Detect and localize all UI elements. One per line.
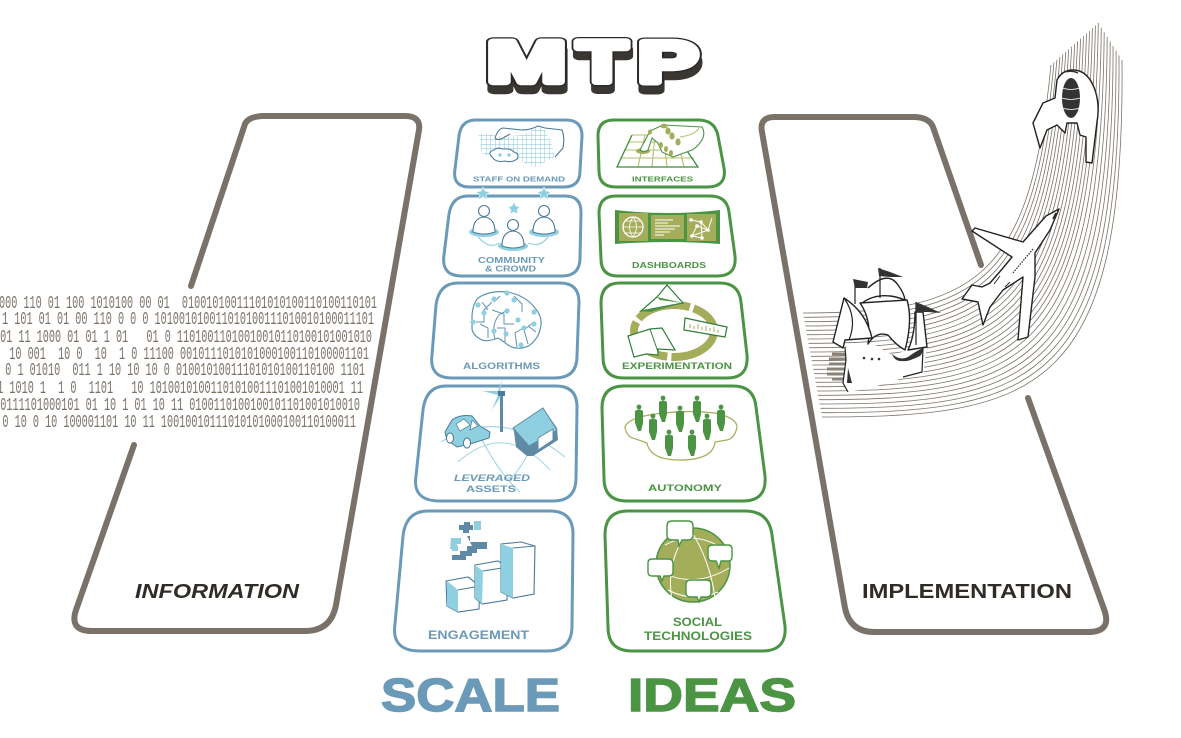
title: MTP	[487, 30, 699, 103]
tile: engagement	[395, 511, 573, 651]
binary data stream: 0 10 0 10 100001101 10 11 10010010111010101000100110100011	[2, 413, 356, 433]
title: MTP: M	[487, 30, 566, 95]
title: MTP: T	[577, 30, 627, 95]
binary data stream	[0, 294, 377, 433]
icon: sailing ship	[827, 268, 941, 392]
tile: autonomy	[602, 386, 765, 501]
binary data stream: 1 1 101 01 01 00 110 0 0 0 101001010011010100111010010100011101	[0, 310, 374, 330]
tile: algorithms: ALGORITHMS	[463, 361, 540, 371]
icon: rocket	[1033, 70, 1098, 163]
tile: community and crowd	[444, 196, 581, 276]
title: MTP: P	[638, 30, 698, 95]
tile: social technologies	[605, 511, 785, 651]
tile: algorithms	[432, 283, 579, 378]
tile: leveraged assets: LEVERAGED	[454, 473, 530, 484]
heading: scale: SCALE	[381, 669, 560, 721]
title: MTP: T	[578, 38, 628, 103]
title: MTP: T	[577, 30, 627, 95]
title: MTP: M	[488, 38, 567, 103]
binary data stream: 0111101000101 01 10 1 01 10 11 0100110100100101101001010010	[0, 396, 360, 416]
icon: experiment cycle	[628, 285, 727, 357]
tile: autonomy: AUTONOMY	[648, 483, 723, 494]
tile: experimentation: EXPERIMENTATION	[622, 361, 732, 371]
icon: car, wind turbine and house	[441, 380, 565, 492]
icon: airplane	[962, 209, 1059, 340]
title: MTP: P	[638, 30, 698, 95]
panel: implementation outline	[762, 117, 1106, 632]
icon: circuit brain	[470, 290, 541, 348]
icon: people group	[625, 396, 737, 460]
icon: handshake mesh	[478, 126, 564, 167]
heading: ideas: IDEAS	[628, 669, 796, 721]
icon: hand on grid	[617, 124, 704, 167]
tile: leveraged assets	[416, 380, 577, 501]
tile: dashboards	[599, 196, 735, 276]
tile: experimentation	[601, 283, 747, 378]
tile: community and crowd: & CROWD	[485, 264, 536, 274]
binary data stream: 01 11 1000 01 01 1 01 01 0 11010011010010010110100101001010	[0, 328, 372, 348]
icon: globe with speech bubbles	[648, 521, 732, 602]
icon: pixel man and bar blocks	[446, 521, 535, 612]
binary data stream: 1 1010 1 1 0 1101 10 10100101001101010011101001010001 11	[0, 379, 363, 399]
label: implementation: IMPLEMENTATION	[862, 581, 1072, 603]
icon: stars	[476, 187, 551, 214]
binary data stream: 0 0 1 01010 011 1 10 10 10 0 01001010011101010100110100 1101	[0, 361, 365, 381]
curved motion lines	[803, 23, 1122, 417]
tile: community and crowd: COMMUNITY	[478, 256, 546, 265]
tile: social technologies: SOCIAL	[673, 617, 722, 629]
tile: interfaces	[598, 120, 724, 187]
title: MTP: M	[487, 30, 566, 95]
icon: dashboard screens	[615, 210, 720, 244]
title: MTP: P	[639, 38, 699, 103]
icon: connected people	[469, 206, 559, 251]
tile: leveraged assets: ASSETS	[466, 484, 516, 495]
tile: staff on demand	[455, 120, 582, 187]
panel: information outline	[74, 116, 419, 631]
label: information: INFORMATION	[135, 581, 300, 603]
binary data stream: 000 110 01 100 1010100 00 01 01001010011101010100110100110101	[0, 294, 377, 314]
tile: social technologies: TECHNOLOGIES	[644, 631, 752, 643]
tile: engagement: ENGAGEMENT	[428, 630, 529, 642]
tile: interfaces: INTERFACES	[632, 174, 693, 184]
tile: dashboards: DASHBOARDS	[632, 261, 707, 270]
binary data stream: 10 001 10 0 10 1 0 11100 0010111010101000100110100001101	[9, 345, 369, 365]
tile: staff on demand: STAFF ON DEMAND	[473, 174, 566, 184]
